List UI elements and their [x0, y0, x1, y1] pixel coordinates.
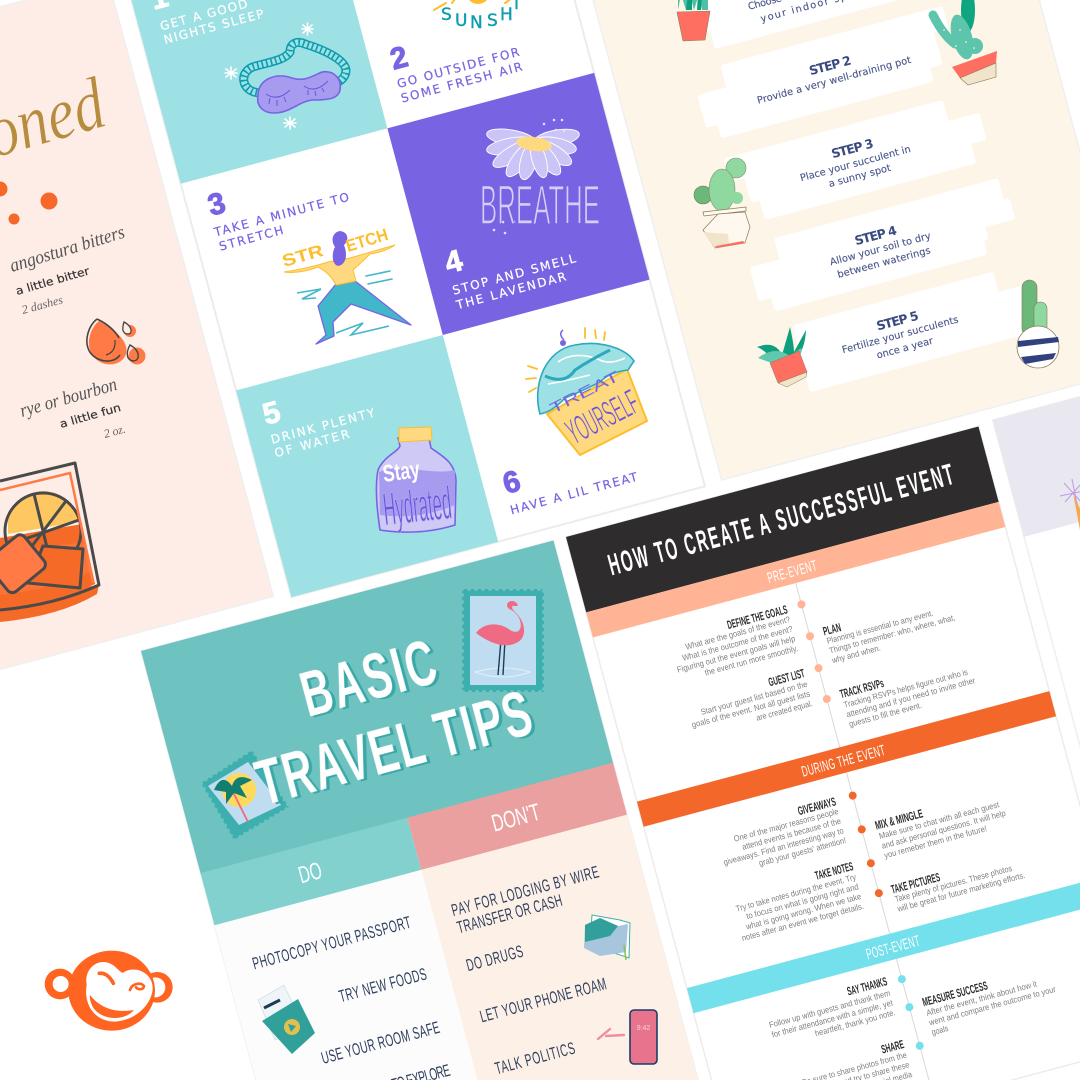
- panel: self care tips grid: YOURSELF: [559, 381, 645, 452]
- icon: phone and earbuds: 9:42: [637, 1025, 650, 1032]
- item: plan: Planning is essential to any event.: [826, 608, 934, 646]
- item: guest list: GUEST LIST: [767, 666, 806, 689]
- icon: aloe in red pot: [757, 327, 807, 387]
- do items: TRY NEW FOODS: [337, 964, 429, 1006]
- icon: document folder: [584, 915, 630, 960]
- section band: post-event: [687, 878, 1080, 1013]
- item: measure success: [921, 962, 1060, 1037]
- step 5 text: once a year: [875, 336, 935, 361]
- item: track rsvps: [838, 653, 979, 729]
- item: mix and mingle: Make sure to chat with all each guest: [878, 799, 1001, 841]
- item: define the goals: [668, 602, 799, 684]
- tip 6 text: 6: [499, 465, 524, 501]
- step 4 text: Allow your soil to dry: [829, 231, 932, 268]
- item: say thanks: heartfelt, thank you note.: [814, 1007, 896, 1038]
- item: giveaways: grab your guests' attention!: [758, 835, 847, 868]
- item: guest list: Start your guest list based on the: [700, 679, 809, 717]
- icon: breathe daisy: [480, 119, 600, 236]
- icon: passport and tickets: [258, 985, 315, 1054]
- icon: bitters drops: [87, 319, 146, 364]
- item: giveaways: [714, 794, 847, 877]
- white brush strokes: [666, 0, 1045, 400]
- icon: sleep mask: [225, 23, 346, 129]
- item: mix and mingle: you remeber them in the future!: [883, 823, 988, 860]
- icon: phone and earbuds: [598, 1010, 657, 1064]
- item: track rsvps: guests to fill the event.: [848, 700, 923, 729]
- travel tips lists: [230, 788, 643, 1080]
- item: giveaways: attend events is because of the: [741, 816, 842, 852]
- timeline line: [796, 583, 934, 1080]
- icon: potted plant top left: [677, 0, 710, 41]
- item: measure success: goals: [930, 1023, 949, 1037]
- item: define the goals: What is the outcome of the event?: [681, 624, 794, 663]
- title band: [566, 426, 999, 612]
- bitters dots: [0, 182, 58, 224]
- icon: cactus with red pot: [933, 0, 997, 85]
- pre-event timeline dots: [797, 599, 832, 704]
- icon: star and orange shape: [1060, 479, 1080, 530]
- tip 4 text: THE LAVENDAR: [454, 269, 568, 312]
- tip 2 text: SOME FRESH AIR: [399, 60, 524, 105]
- step 2 text: Provide a very well-draining pot: [756, 55, 913, 107]
- item: plan: PLAN: [821, 620, 842, 638]
- heading: basic travel tips: BASIC: [293, 627, 444, 731]
- panel: how to create a successful event: [566, 426, 1080, 1080]
- section band: during the event: [637, 691, 1056, 827]
- panel: self care tips grid: Hydrated: [381, 476, 454, 535]
- item: say thanks: [764, 974, 897, 1049]
- tip 3 text: TAKE A MINUTE TO: [212, 190, 351, 240]
- icon: cocktail glass: [0, 463, 99, 622]
- step 5 text: [837, 298, 963, 370]
- heading: basic travel tips: TRAVEL TIPS: [248, 678, 539, 819]
- icon: cactus in geometric pot: [694, 158, 750, 248]
- step 3 text: [794, 127, 915, 197]
- don't items: PAY FOR LODGING BY WIRE: [449, 862, 601, 920]
- step 1 text: [747, 0, 877, 27]
- icon: cactus in striped pot: [1017, 280, 1059, 368]
- ingredient: rye or bourbon: rye or bourbon: [18, 374, 120, 422]
- item: take notes: to focus on what is going right and: [745, 881, 860, 921]
- do items: [250, 912, 454, 1080]
- item: take notes: what is going wrong. When we take: [744, 891, 862, 932]
- ingredient: angostura bitters: angostura bitters: [7, 222, 127, 277]
- tip 6 text: [499, 435, 639, 517]
- tip 6 text: HAVE A LIL TREAT: [509, 470, 639, 517]
- icon: stretching figure: [280, 225, 411, 344]
- section band: during the event: DURING THE EVENT: [800, 741, 887, 780]
- tip 4 text: [440, 215, 581, 312]
- panel: self care tips grid: BREATHE: [480, 173, 600, 236]
- panel: basic travel tips: [141, 540, 736, 1080]
- item: measure success: MEASURE SUCCESS: [921, 978, 989, 1009]
- post-event timeline dots: [897, 974, 925, 1051]
- item: define the goals: DEFINE THE GOALS: [726, 602, 789, 632]
- tip 4 text: 4: [441, 244, 466, 280]
- section band: post-event: POST-EVENT: [864, 932, 922, 963]
- item: guest list: are created equal.: [755, 698, 814, 723]
- tip 5 text: OF WATER: [273, 427, 351, 460]
- item: define the goals: the event run more smoothly.: [704, 643, 799, 678]
- item: define the goals: Figuring out the event goals will help: [676, 633, 797, 675]
- step 3 text: a sunny spot: [827, 163, 892, 190]
- item: giveaways: One of the major reasons people: [733, 806, 840, 844]
- item: track rsvps: attending and if you need to invite other: [845, 675, 976, 719]
- column heading: do: DO: [296, 857, 325, 889]
- icon: stretching figure: STR: [280, 241, 325, 271]
- section band: pre-event: [586, 502, 1005, 637]
- item: mix and mingle: [873, 786, 1009, 861]
- tip 3 text: STRETCH: [218, 223, 285, 254]
- item: take pictures: will be great for future marketing efforts.: [895, 870, 1026, 914]
- step 5 text: Fertilize your succulents: [841, 314, 960, 356]
- item: giveaways: GIVEAWAYS: [796, 794, 837, 818]
- don't items: TALK POLITICS: [493, 1038, 577, 1078]
- item: track rsvps: Tracking RSVPs helps figure out who is: [843, 667, 969, 710]
- tip 2 text: 2: [387, 40, 411, 77]
- item: say thanks: SAY THANKS: [845, 974, 889, 998]
- icon: stretching figure: ETCH: [344, 225, 390, 256]
- icon: palm tree stamp: [201, 750, 289, 840]
- don't items: TRANSFER OR CASH: [455, 890, 564, 937]
- section band: pre-event: PRE-EVENT: [765, 557, 819, 587]
- don't items: LET YOUR PHONE ROAM: [478, 974, 608, 1026]
- step 5 text: STEP 5: [875, 308, 920, 333]
- ingredient: angostura bitters: a little bitter: [14, 264, 91, 298]
- icon: treat yourself cupcake: TREAT: [547, 368, 623, 418]
- item: mix and mingle: MIX & MINGLE: [873, 806, 924, 833]
- item: say thanks: for their attendance with a simple, yet: [771, 997, 894, 1040]
- ingredient: rye or bourbon: a little fun: [58, 401, 122, 431]
- icon: stay hydrated bottle: [376, 427, 456, 535]
- during timeline dots: [848, 791, 884, 898]
- ingredient: angostura bitters: [7, 222, 127, 317]
- ingredient: rye or bourbon: 2 oz.: [102, 422, 127, 441]
- sparkles: [225, 23, 313, 129]
- tip 5 text: DRINK PLENTY: [269, 405, 377, 447]
- do items: PHOTOCOPY YOUR PASSPORT: [250, 912, 413, 973]
- item: mix and mingle: and ask personal questions. It will help: [880, 808, 1007, 851]
- item: giveaways: giveaways. Find an interesting way to: [722, 825, 845, 867]
- item: take pictures: TAKE PICTURES: [890, 870, 942, 897]
- step 4 text: STEP 4: [853, 222, 899, 248]
- heading: basic travel tips: [229, 606, 539, 819]
- tip 1 text: NIGHTS SLEEP: [162, 7, 265, 47]
- do items: USE YOUR ROOM SAFE: [319, 1017, 442, 1067]
- item: take pictures: [890, 849, 1026, 914]
- item: plan: Things to remember: who, where, what,: [828, 612, 956, 656]
- tip 2 text: [387, 12, 525, 105]
- step 4 text: between waterings: [836, 245, 932, 281]
- item: plan: [821, 591, 959, 665]
- item: track rsvps: TRACK RSVPs: [838, 676, 886, 701]
- step 3 text: Place your succulent in: [799, 144, 912, 184]
- item: plan: why and when.: [830, 643, 882, 665]
- tip 4 text: STOP AND SMELL: [451, 251, 578, 298]
- icon: treat yourself cupcake: [526, 328, 647, 455]
- logo: monkey: [45, 951, 173, 1031]
- don't items: [449, 862, 643, 1078]
- don't items: DO DRUGS: [464, 941, 525, 975]
- panel: self care tips grid: [125, 0, 705, 597]
- column heading: don't: DON'T: [489, 799, 543, 838]
- item: guest list: [685, 666, 814, 739]
- tip 5 text: [259, 372, 381, 461]
- item: take notes: TAKE NOTES: [813, 859, 855, 883]
- item: share: SHARE: [880, 1037, 906, 1057]
- item: define the goals: What are the goals of the event?: [684, 614, 791, 652]
- item: measure success: went and compare the outcome to your: [927, 984, 1057, 1028]
- ingredient: rye or bourbon: [18, 374, 127, 441]
- item: say thanks: Follow up with guests and thank them: [768, 988, 891, 1030]
- panel: old fashioned cocktail recipe: [0, 0, 273, 707]
- item: take notes: Try to take notes during the event. Try: [735, 872, 858, 913]
- icon: stay hydrated bottle: Stay: [381, 456, 422, 488]
- step 4 text: [824, 214, 936, 282]
- tip 3 text: 3: [204, 187, 229, 223]
- ingredient: angostura bitters: 2 dashes: [20, 292, 65, 317]
- item: take notes: [729, 859, 865, 943]
- panel background and cells: [125, 0, 705, 597]
- step 3 text: STEP 3: [830, 136, 875, 161]
- item: take notes: notes after an event we forget details.: [741, 901, 865, 943]
- item: measure success: After the event, think about how it: [925, 978, 1038, 1018]
- tip 5 text: 5: [259, 395, 284, 432]
- item: guest list: goals of the event. Not all guest lists: [691, 688, 811, 730]
- step 2 text: STEP 2: [807, 53, 853, 78]
- item: take pictures: Take plenty of pictures. These photos: [894, 863, 1013, 904]
- panel: succulent care steps: [541, 0, 1080, 480]
- icon: flamingo stamp: [462, 589, 544, 692]
- title: HOW TO CREATE A SUCCESSFUL EVENT: [605, 459, 958, 583]
- tip 2 text: GO OUTSIDE FOR: [396, 45, 521, 91]
- tip 3 text: [202, 155, 354, 254]
- panel: lilac template partly visible: [993, 342, 1080, 1080]
